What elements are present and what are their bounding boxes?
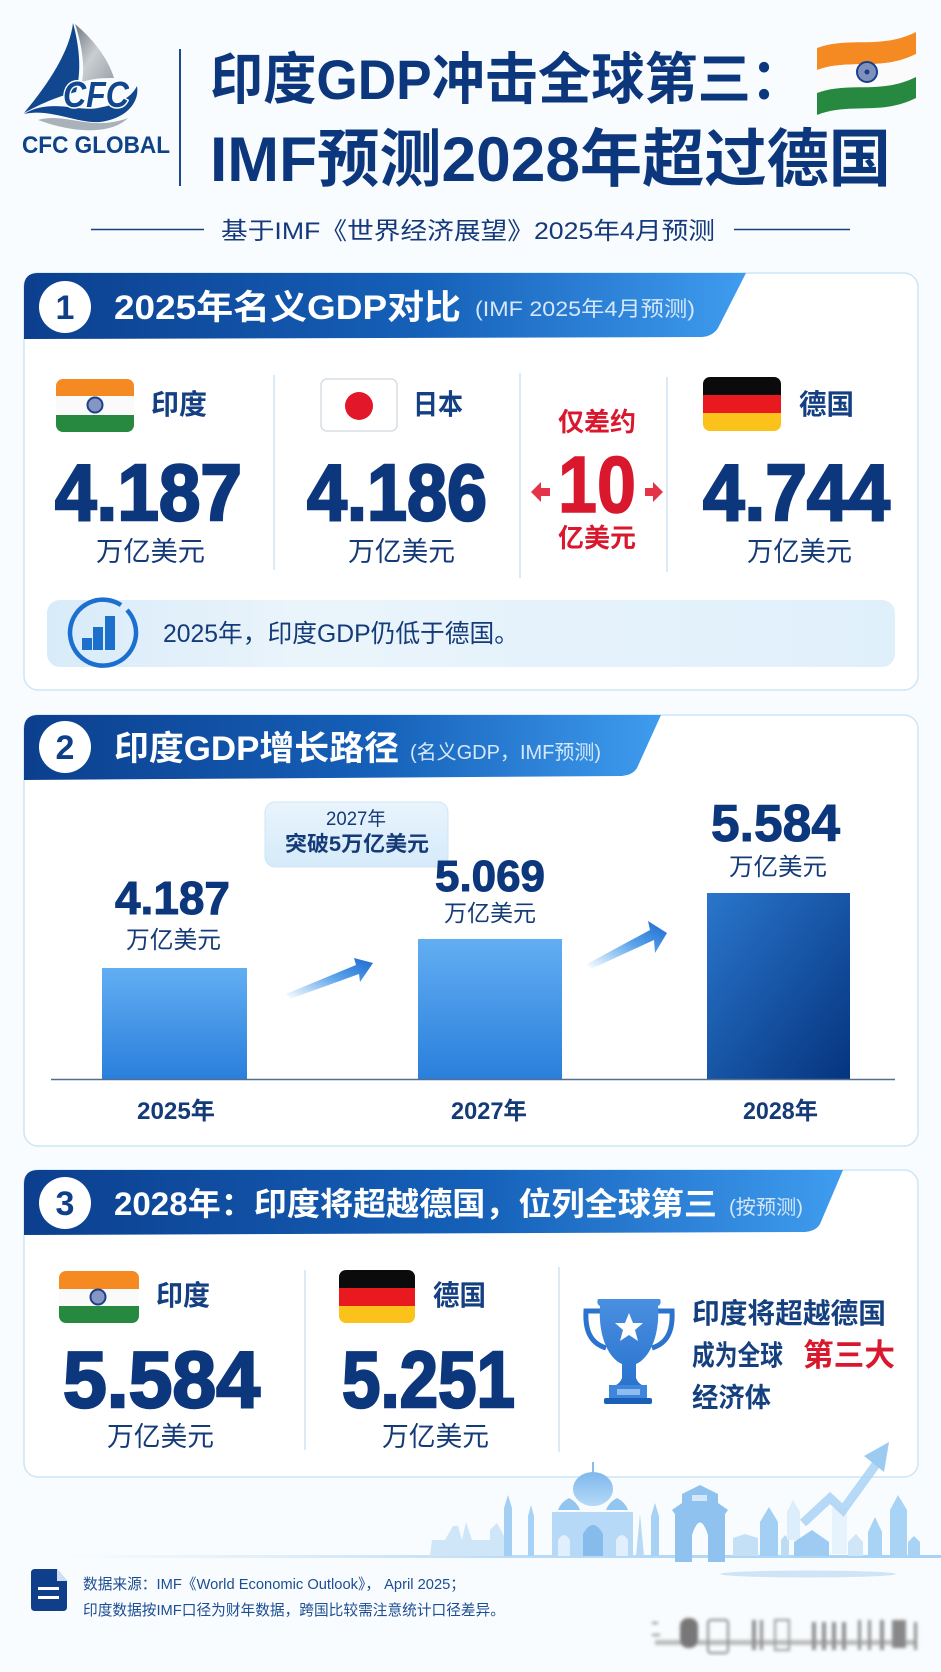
- column: Germany: 德国: [799, 389, 854, 420]
- callout: 2027: [265, 802, 448, 867]
- bar 2028: 5.584: [711, 795, 840, 853]
- logo: CFC GLOBAL: CFC: [63, 74, 130, 115]
- column: India: 印度: [151, 389, 207, 420]
- panel 1 header band: [24, 273, 746, 339]
- title: IMF预测2028年超过德国: [210, 125, 891, 195]
- column: Germany 2028: 5.251: [342, 1335, 515, 1424]
- number badge 1: 1: [56, 289, 74, 327]
- callout: difference: [531, 407, 663, 553]
- conclusion text: 第三大: [803, 1338, 895, 1373]
- column: India 2028: 万亿美元: [107, 1422, 214, 1452]
- panel 3 header band: [24, 1170, 843, 1235]
- callout: 2027: 突破5万亿美元: [285, 832, 429, 856]
- column: India 2028: [59, 1271, 260, 1452]
- title: 印度GDP冲击全球第三：: [210, 48, 804, 111]
- column: Japan: 4.186: [307, 448, 487, 537]
- column: Germany 2028: [339, 1270, 515, 1452]
- panel: 2028 overtakes Germany: [24, 1170, 918, 1477]
- number badge 2: 2: [56, 729, 74, 767]
- Taj Mahal: [552, 1462, 644, 1556]
- number badge 2: [39, 721, 91, 773]
- note bar: [47, 600, 895, 667]
- bar 2027: 5.069: [435, 852, 545, 901]
- bar 2028: 2028年: [743, 1098, 818, 1125]
- panel: 2025 GDP comparison: [24, 273, 918, 690]
- note text: 2025年，印度GDP仍低于德国。: [163, 620, 519, 648]
- footer source note: [31, 1569, 505, 1619]
- panel 3 heading: 2028年：印度将超越德国，位列全球第三: [114, 1186, 717, 1222]
- icon: document: [31, 1569, 67, 1611]
- column: Japan: 万亿美元: [348, 537, 455, 567]
- panel 3 sub heading: (按预测): [729, 1196, 803, 1219]
- column: Germany: 4.744: [703, 448, 890, 537]
- arrow: 2025 to 2027: [286, 958, 373, 999]
- blurred watermark: [652, 1618, 917, 1653]
- arrow: 2027 to 2028: [587, 921, 667, 969]
- number badge 1: [39, 281, 91, 333]
- callout: difference: 亿美元: [558, 523, 636, 553]
- panel 2 heading: 印度GDP增长路径: [114, 730, 399, 768]
- bar 2028: [707, 795, 850, 1125]
- column: Japan: [307, 379, 487, 567]
- bar 2027: 2027年: [451, 1098, 527, 1125]
- skyline illustration: [60, 1442, 941, 1578]
- column: India 2028: 印度: [156, 1280, 210, 1311]
- bar 2027: 万亿美元: [444, 900, 536, 926]
- conclusion text: 经济体: [692, 1383, 771, 1413]
- bar 2025: 4.187: [115, 872, 230, 924]
- panel 1 sub heading: (IMF 2025年4月预测): [475, 298, 695, 321]
- panel: India GDP growth path: [24, 715, 918, 1146]
- panel 1 heading: 2025年名义GDP对比: [114, 289, 461, 327]
- column: India: [55, 379, 242, 567]
- column: Germany: 万亿美元: [747, 537, 852, 567]
- panel 2 header band: [24, 715, 661, 780]
- header divider: [179, 49, 181, 186]
- conclusion text: 印度将超越德国: [692, 1298, 886, 1329]
- footer source note: 印度数据按IMF口径为财年数据，跨国比较需注意统计口径差异。: [83, 1601, 505, 1619]
- callout: difference: 10: [558, 440, 636, 529]
- column: Germany 2028: 万亿美元: [382, 1422, 489, 1452]
- bar 2025: [102, 872, 247, 1125]
- title: [210, 48, 891, 195]
- icon: trophy: [586, 1299, 672, 1404]
- column: India: 4.187: [55, 448, 242, 537]
- bar 2025: 万亿美元: [126, 927, 221, 954]
- India Gate: [672, 1485, 728, 1562]
- callout: 2027: 2027年: [326, 808, 386, 830]
- panel 2 sub heading: (名义GDP，IMF预测): [410, 741, 601, 764]
- callout: difference: 仅差约: [558, 407, 636, 437]
- subtitle: 基于IMF《世界经济展望》2025年4月预测: [221, 218, 715, 245]
- bar 2025: 2025年: [137, 1098, 215, 1125]
- column: Japan: 日本: [413, 389, 463, 420]
- icon: bar chart in ring: [70, 600, 136, 666]
- bar chart: [51, 795, 895, 1125]
- conclusion text: [692, 1298, 895, 1413]
- bar 2028: 万亿美元: [729, 854, 827, 881]
- number badge 3: [39, 1177, 91, 1229]
- column: India: 万亿美元: [96, 537, 205, 567]
- icon: waving India flag: [817, 32, 916, 115]
- logo: CFC GLOBAL: CFC GLOBAL: [22, 132, 170, 159]
- right city: [733, 1534, 758, 1556]
- column: Germany: [703, 377, 890, 567]
- column: India 2028: 5.584: [63, 1335, 260, 1424]
- bar 2027: [418, 852, 562, 1125]
- conclusion text: 成为全球: [692, 1340, 783, 1371]
- growth arrow: [803, 1442, 889, 1523]
- logo: CFC GLOBAL: [22, 23, 170, 159]
- minarets: [504, 1495, 512, 1556]
- number badge 3: 3: [56, 1185, 74, 1223]
- footer source note: 数据来源：IMF《World Economic Outlook》， April 2025；: [83, 1576, 465, 1593]
- left low buildings: [430, 1522, 506, 1556]
- column: Germany 2028: 德国: [433, 1280, 486, 1311]
